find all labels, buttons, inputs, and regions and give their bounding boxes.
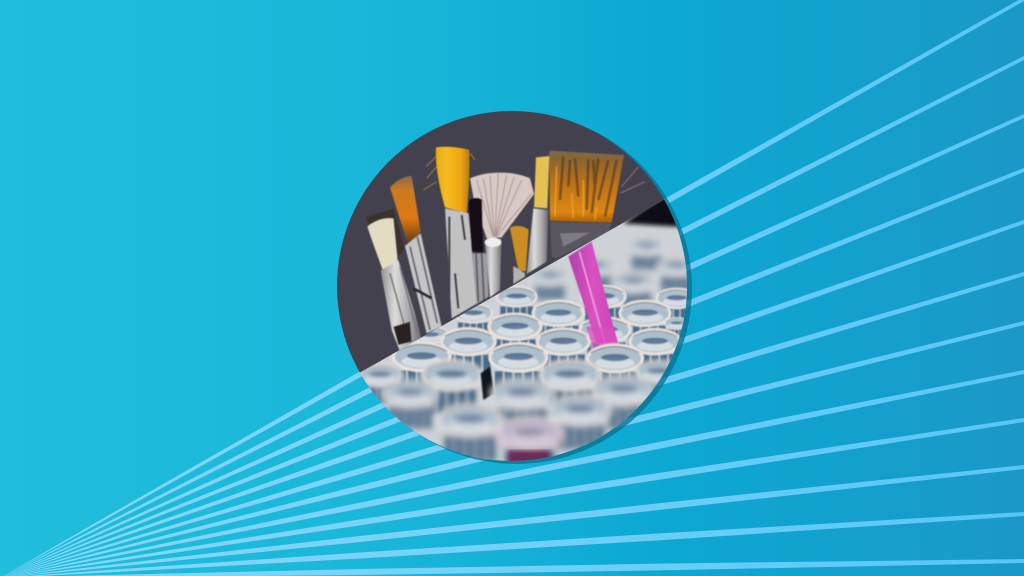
orange worn brush [390,176,442,333]
pink pipette tip [568,242,620,348]
fan brush [470,173,534,297]
small black brush [468,198,489,304]
dark studio backdrop [337,111,687,461]
paintbrushes photo [366,147,645,352]
middle rows of tubes [412,301,688,377]
circular photo split diagonally [337,111,687,461]
large orange angled brush [549,151,645,258]
circle drop shadow [341,113,692,464]
pink haze [493,418,567,455]
foreground tubes [383,375,653,473]
dark top corner [622,200,678,230]
small orange brush [510,226,529,284]
test tube plate photo [360,200,687,461]
yellow flat brush [423,147,477,318]
dark gap spot [481,367,494,400]
front rows of tubes [393,343,643,395]
plate background [360,200,687,461]
blurred near tubes [358,360,680,414]
back rows of tubes [532,238,695,309]
slim yellow brush [527,156,549,274]
dark purple tube base [508,451,550,464]
worn white brush [366,208,422,352]
